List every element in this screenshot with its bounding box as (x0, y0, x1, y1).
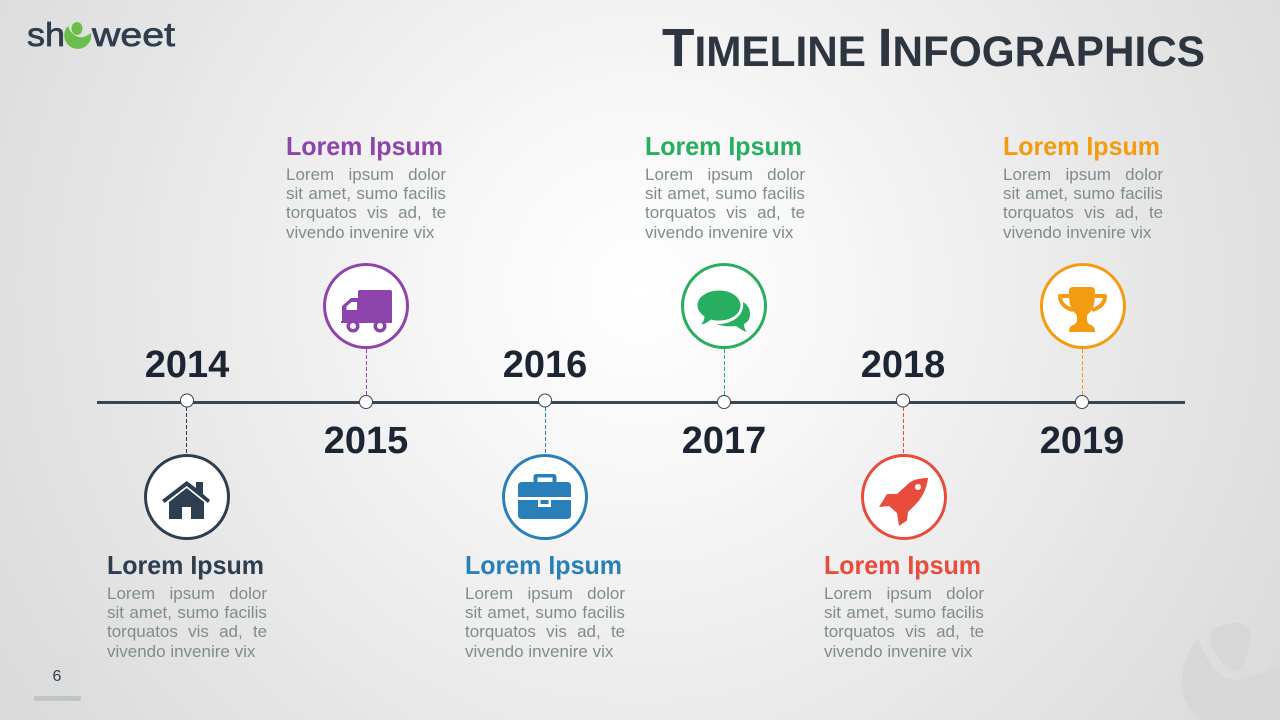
logo: sh (27, 16, 65, 53)
connector 2019 (1082, 349, 1084, 396)
text block 2018: vivendo invenire vix (824, 642, 973, 661)
connector 2016 (544, 407, 546, 455)
year 2014: 2014 (145, 344, 229, 386)
logo (27, 16, 175, 53)
text block 2016: Lorem Ipsum (465, 550, 622, 580)
milestone 2016 (465, 344, 625, 661)
node 2017 (718, 396, 730, 408)
icon: chat bubbles (682, 264, 766, 348)
watermark logo (1182, 623, 1280, 720)
icon: trophy (1042, 264, 1124, 348)
milestone 2017 (645, 131, 805, 462)
text block 2018: Lorem ipsum dolor (824, 584, 984, 603)
node 2015 (360, 396, 372, 408)
text block 2018 (824, 550, 984, 661)
text block 2017: sit amet, sumo facilis (645, 184, 805, 203)
connector 2015 (366, 349, 368, 396)
text block 2014: vivendo invenire vix (107, 642, 256, 661)
text block 2015: Lorem ipsum dolor (286, 165, 446, 184)
text block 2019: sit amet, sumo facilis (1003, 184, 1163, 203)
year 2015: 2015 (324, 420, 408, 462)
text block 2017 (645, 131, 805, 242)
text block 2018: Lorem Ipsum (824, 550, 981, 580)
year 2016: 2016 (503, 344, 587, 386)
page number: 6 (53, 668, 62, 685)
icon: house (146, 456, 228, 538)
year 2019: 2019 (1040, 420, 1124, 462)
icon: truck (324, 264, 408, 348)
text block 2017: vivendo invenire vix (645, 223, 794, 242)
node 2016 (538, 394, 552, 407)
text block 2018: sit amet, sumo facilis (824, 603, 984, 622)
text block 2018: torquatos vis ad, te (824, 622, 984, 641)
connector 2018 (902, 407, 904, 455)
text block 2019 (1003, 131, 1163, 242)
text block 2014: Lorem Ipsum (107, 550, 264, 580)
text block 2017: torquatos vis ad, te (645, 203, 805, 222)
text block 2017: Lorem ipsum dolor (645, 165, 805, 184)
text block 2016 (465, 550, 625, 661)
icon: rocket (862, 456, 946, 538)
milestone 2015 (286, 131, 446, 462)
text block 2014: torquatos vis ad, te (107, 622, 267, 641)
text block 2015: Lorem Ipsum (286, 131, 443, 161)
text block 2015 (286, 131, 446, 242)
node 2018 (896, 394, 910, 407)
text block 2016: torquatos vis ad, te (465, 622, 625, 641)
title: TIMELINE INFOGRAPHICS (662, 18, 1205, 78)
node 2019 (1076, 396, 1088, 408)
text block 2014: sit amet, sumo facilis (107, 603, 267, 622)
text block 2017: Lorem Ipsum (645, 131, 802, 161)
text block 2016: vivendo invenire vix (465, 642, 614, 661)
text block 2014 (107, 550, 267, 661)
connector 2014 (186, 407, 188, 455)
text block 2016: sit amet, sumo facilis (465, 603, 625, 622)
text block 2015: torquatos vis ad, te (286, 203, 446, 222)
text block 2019: vivendo invenire vix (1003, 223, 1152, 242)
text block 2016: Lorem ipsum dolor (465, 584, 625, 603)
milestone 2019 (1003, 131, 1163, 462)
page number (34, 655, 81, 701)
node 2014 (180, 394, 194, 407)
logo: weet (91, 16, 175, 53)
text block 2019: Lorem ipsum dolor (1003, 165, 1163, 184)
text block 2015: vivendo invenire vix (286, 223, 435, 242)
text block 2015: sit amet, sumo facilis (286, 184, 446, 203)
milestone 2018 (824, 344, 984, 661)
text block 2019: Lorem Ipsum (1003, 131, 1160, 161)
year 2018: 2018 (861, 344, 945, 386)
timeline axis (97, 401, 1185, 404)
year 2017: 2017 (682, 420, 766, 462)
text block 2014: Lorem ipsum dolor (107, 584, 267, 603)
connector 2017 (724, 349, 726, 396)
milestone 2014 (107, 344, 267, 661)
icon: briefcase (504, 456, 586, 538)
text block 2019: torquatos vis ad, te (1003, 203, 1163, 222)
